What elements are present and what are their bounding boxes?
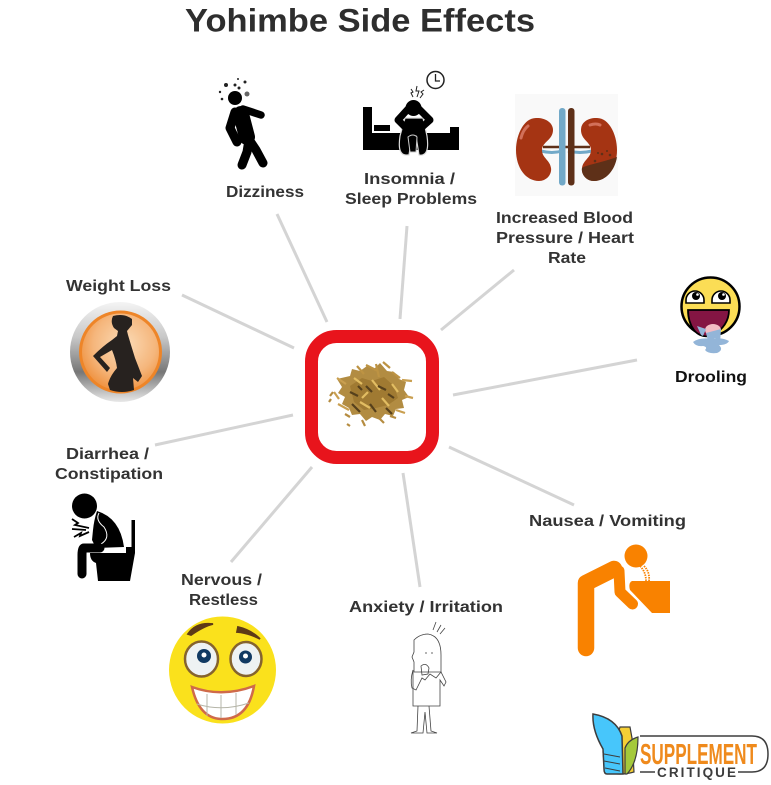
label: nervous: Restless: [189, 592, 258, 609]
label: insomnia: [345, 171, 477, 208]
label: dizziness: Dizziness: [226, 184, 304, 201]
label: diarrhea: [55, 446, 163, 483]
icon: nervous face: [169, 616, 276, 724]
label: insomnia: Sleep Problems: [345, 191, 477, 208]
central panel: yohimbe bark: [312, 336, 432, 458]
label: blood pressure: Pressure / Heart: [496, 230, 635, 247]
icon: kidneys: [515, 94, 618, 196]
label: blood pressure: Increased Blood: [496, 210, 633, 227]
icon: anxious man line art: [411, 622, 446, 733]
icon: weight loss badge: [70, 302, 170, 402]
silhouette: [93, 315, 142, 392]
icon: bark pile: [329, 362, 413, 426]
logo: Supplement Critique: CRITIQUE: [657, 765, 736, 780]
label: nervous: [181, 572, 263, 609]
icon: drooling face: [682, 278, 740, 353]
icon: dizzy figure: [219, 78, 263, 165]
label: weight loss: Weight Loss: [66, 278, 171, 295]
icon: person on bed: [363, 72, 459, 155]
label: blood pressure: Rate: [548, 250, 586, 267]
connector lines: [155, 214, 637, 587]
icon: person on toilet: [72, 494, 135, 581]
label: anxiety: Anxiety / Irritation: [349, 599, 503, 616]
label: diarrhea: Diarrhea /: [66, 446, 150, 463]
label: blood pressure: [496, 210, 635, 267]
icon: clock: [427, 72, 444, 88]
label: nausea: Nausea / Vomiting: [529, 513, 686, 530]
label: diarrhea: Constipation: [55, 466, 163, 483]
label: nervous: Nervous /: [181, 572, 263, 589]
icon: vomiting figure: [586, 544, 670, 648]
figure: [398, 100, 430, 155]
logo: Supplement Critique: [593, 714, 768, 780]
label: insomnia: Insomnia /: [364, 171, 456, 188]
title: Yohimbe Side Effects: [185, 2, 535, 38]
label: drooling: Drooling: [675, 369, 747, 386]
